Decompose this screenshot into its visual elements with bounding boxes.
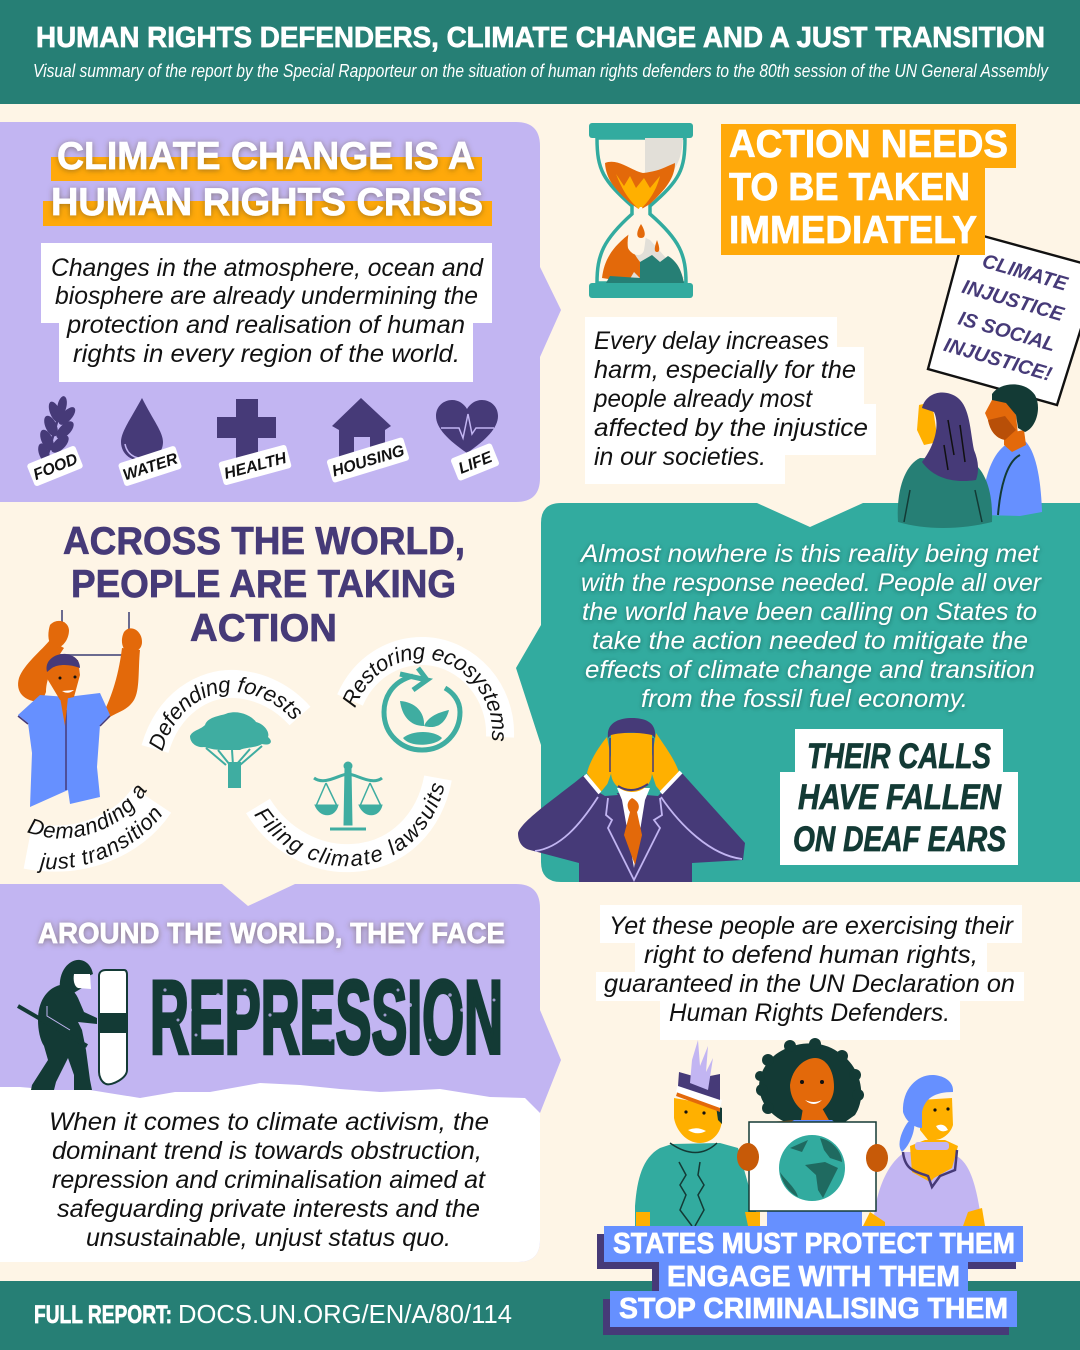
white torn paper panel: unsustainable, unjust status quo. (86, 1224, 451, 1252)
footer band (0, 1281, 1080, 1350)
text block: protection and realisation of human (66, 311, 465, 339)
callout: their calls have fallen on deaf ears (780, 729, 1018, 865)
label: food: FOOD (31, 451, 81, 484)
panel: climate change is a human rights crisis (0, 122, 561, 502)
icon: wheat food (36, 395, 78, 468)
icon: scales of justice (314, 762, 382, 829)
heading: AROUND THE WORLD, THEY FACE (38, 918, 505, 950)
white torn paper panel: repression and criminalisation aimed at (52, 1166, 486, 1194)
curved label: defending forests: Defending forests (149, 677, 301, 752)
illustration: riot police with shield (18, 960, 128, 1090)
text block: every delay: people already most (593, 385, 813, 413)
text block: with the response needed. People all over (581, 569, 1043, 597)
white torn paper panel (0, 1083, 540, 1262)
figure: woman with braid (863, 1075, 985, 1226)
callout: their calls have fallen on deaf ears: ON DEAF EARS (793, 820, 1006, 859)
curved label: filing climate lawsuits: Filing climate lawsuits (254, 783, 444, 866)
figure: woman with curly hair (755, 1038, 864, 1227)
hands (737, 1143, 888, 1172)
protest sign: climate injustice is social injustice: CLIMATE (980, 250, 1070, 296)
callout: their calls have fallen on deaf ears: THEIR CALLS (807, 737, 991, 776)
text block: Changes in the atmosphere, ocean and (51, 254, 484, 282)
heading: action needs to be taken immediately: TO BE TAKEN (729, 166, 970, 209)
icon: sprout in circular arrow (384, 668, 460, 750)
white torn paper panel: dominant trend is towards obstruction, (52, 1137, 482, 1165)
text block: every delay: in our societies. (594, 443, 766, 471)
curved label: restoring ecosystems: Restoring ecosystems (342, 646, 504, 742)
heading: HUMAN RIGHTS CRISIS (51, 181, 483, 224)
text block: Almost nowhere is this reality being met (579, 540, 1040, 568)
heading highlight bars (43, 157, 492, 226)
white torn paper panel: When it comes to climate activism, the (49, 1108, 489, 1136)
text block: right to defend human rights: Yet these people are exercising their (609, 912, 1015, 940)
icon: house (332, 398, 391, 460)
text block: biosphere are already undermining the (55, 282, 478, 310)
callout: states must protect them: STATES MUST PROTECT THEM (613, 1228, 1015, 1260)
headline: repression (150, 960, 503, 1076)
text block: every delay: harm, especially for the (594, 356, 856, 384)
panel: they face repression (0, 884, 561, 1262)
protest sign: climate injustice is social injustice (928, 231, 1080, 405)
label: life: LIFE (456, 449, 496, 478)
text block: right to defend human rights: right to defend human rights, (644, 941, 978, 969)
text block: right to defend human rights: guaranteed in the UN Declaration on (604, 970, 1015, 998)
icon: heart with pulse (436, 400, 498, 453)
text block (579, 540, 1043, 713)
header banner (0, 0, 1080, 104)
text block: rights in every region of the world. (73, 340, 460, 368)
white torn paper panel: safeguarding private interests and the (57, 1195, 480, 1223)
panel: almost nowhere teal (516, 503, 1080, 882)
icon: water drop (121, 398, 163, 461)
headline: repression: REPRESSION (150, 960, 503, 1076)
label: health: HEALTH (222, 450, 289, 483)
illustration: three defenders with globe sign (635, 1038, 985, 1227)
icon: hourglass (589, 123, 693, 298)
text block: the world have been calling on States to (582, 598, 1037, 626)
sign with globe (749, 1122, 876, 1211)
text block: effects of climate change and transition (585, 656, 1035, 684)
full report link: FULL REPORT: (34, 1301, 172, 1329)
figure: man in feather headdress (635, 1040, 760, 1226)
illustration: suited man covering ears (518, 718, 745, 882)
text block: take the action needed to mitigate the (592, 627, 1028, 655)
text block: every delay: affected by the injustice (594, 414, 868, 442)
curved label: demanding a just transition: just transition (36, 808, 162, 873)
title: HUMAN RIGHTS DEFENDERS, CLIMATE CHANGE AND A JUST TRANSITION (36, 22, 1045, 54)
protest sign: climate injustice is social injustice: INJUSTICE! (941, 334, 1054, 386)
icon: health cross (217, 399, 276, 460)
callout: their calls have fallen on deaf ears: HAVE FALLEN (798, 778, 1002, 817)
label: life (450, 443, 500, 481)
text block: every delay (585, 317, 876, 484)
illustration: two protesters (898, 384, 1042, 528)
heading: across the world, people are taking action: ACROSS THE WORLD, (63, 520, 465, 563)
text block (41, 243, 492, 382)
text block: every delay: Every delay increases (594, 327, 829, 355)
icon: tree (190, 712, 271, 788)
heading (51, 135, 483, 224)
label: housing: HOUSING (330, 442, 407, 480)
heading: across the world, people are taking action: PEOPLE ARE TAKING (71, 563, 456, 606)
curved label: demanding a just transition: Demanding a (27, 786, 147, 839)
callout: states must protect them: ENGAGE WITH THEM (667, 1261, 960, 1293)
heading: action needs to be taken immediately (721, 123, 1016, 255)
label: food (26, 445, 84, 487)
heading: action needs to be taken immediately: ACTION NEEDS (729, 123, 1008, 166)
heading: across the world, people are taking action: ACTION (190, 607, 337, 650)
callout: states must protect them (597, 1226, 1023, 1335)
text block: right to defend human rights (596, 905, 1024, 1040)
heading: CLIMATE CHANGE IS A (57, 135, 475, 178)
illustration: man holding banner (18, 610, 142, 807)
text block: from the fossil fuel economy. (641, 685, 968, 713)
protest sign: climate injustice is social injustice: INJUSTICE (959, 276, 1067, 326)
label: water: WATER (121, 450, 180, 484)
footer band: DOCS.UN.ORG/EN/A/80/114 (178, 1299, 512, 1329)
heading: across the world, people are taking action (63, 520, 465, 650)
callout: states must protect them: STOP CRIMINALISING THEM (619, 1293, 1008, 1325)
text block: right to defend human rights: Human Rights Defenders. (669, 999, 950, 1027)
heading: action needs to be taken immediately: IMMEDIATELY (729, 209, 977, 252)
protest sign: climate injustice is social injustice: IS SOCIAL (956, 308, 1058, 356)
